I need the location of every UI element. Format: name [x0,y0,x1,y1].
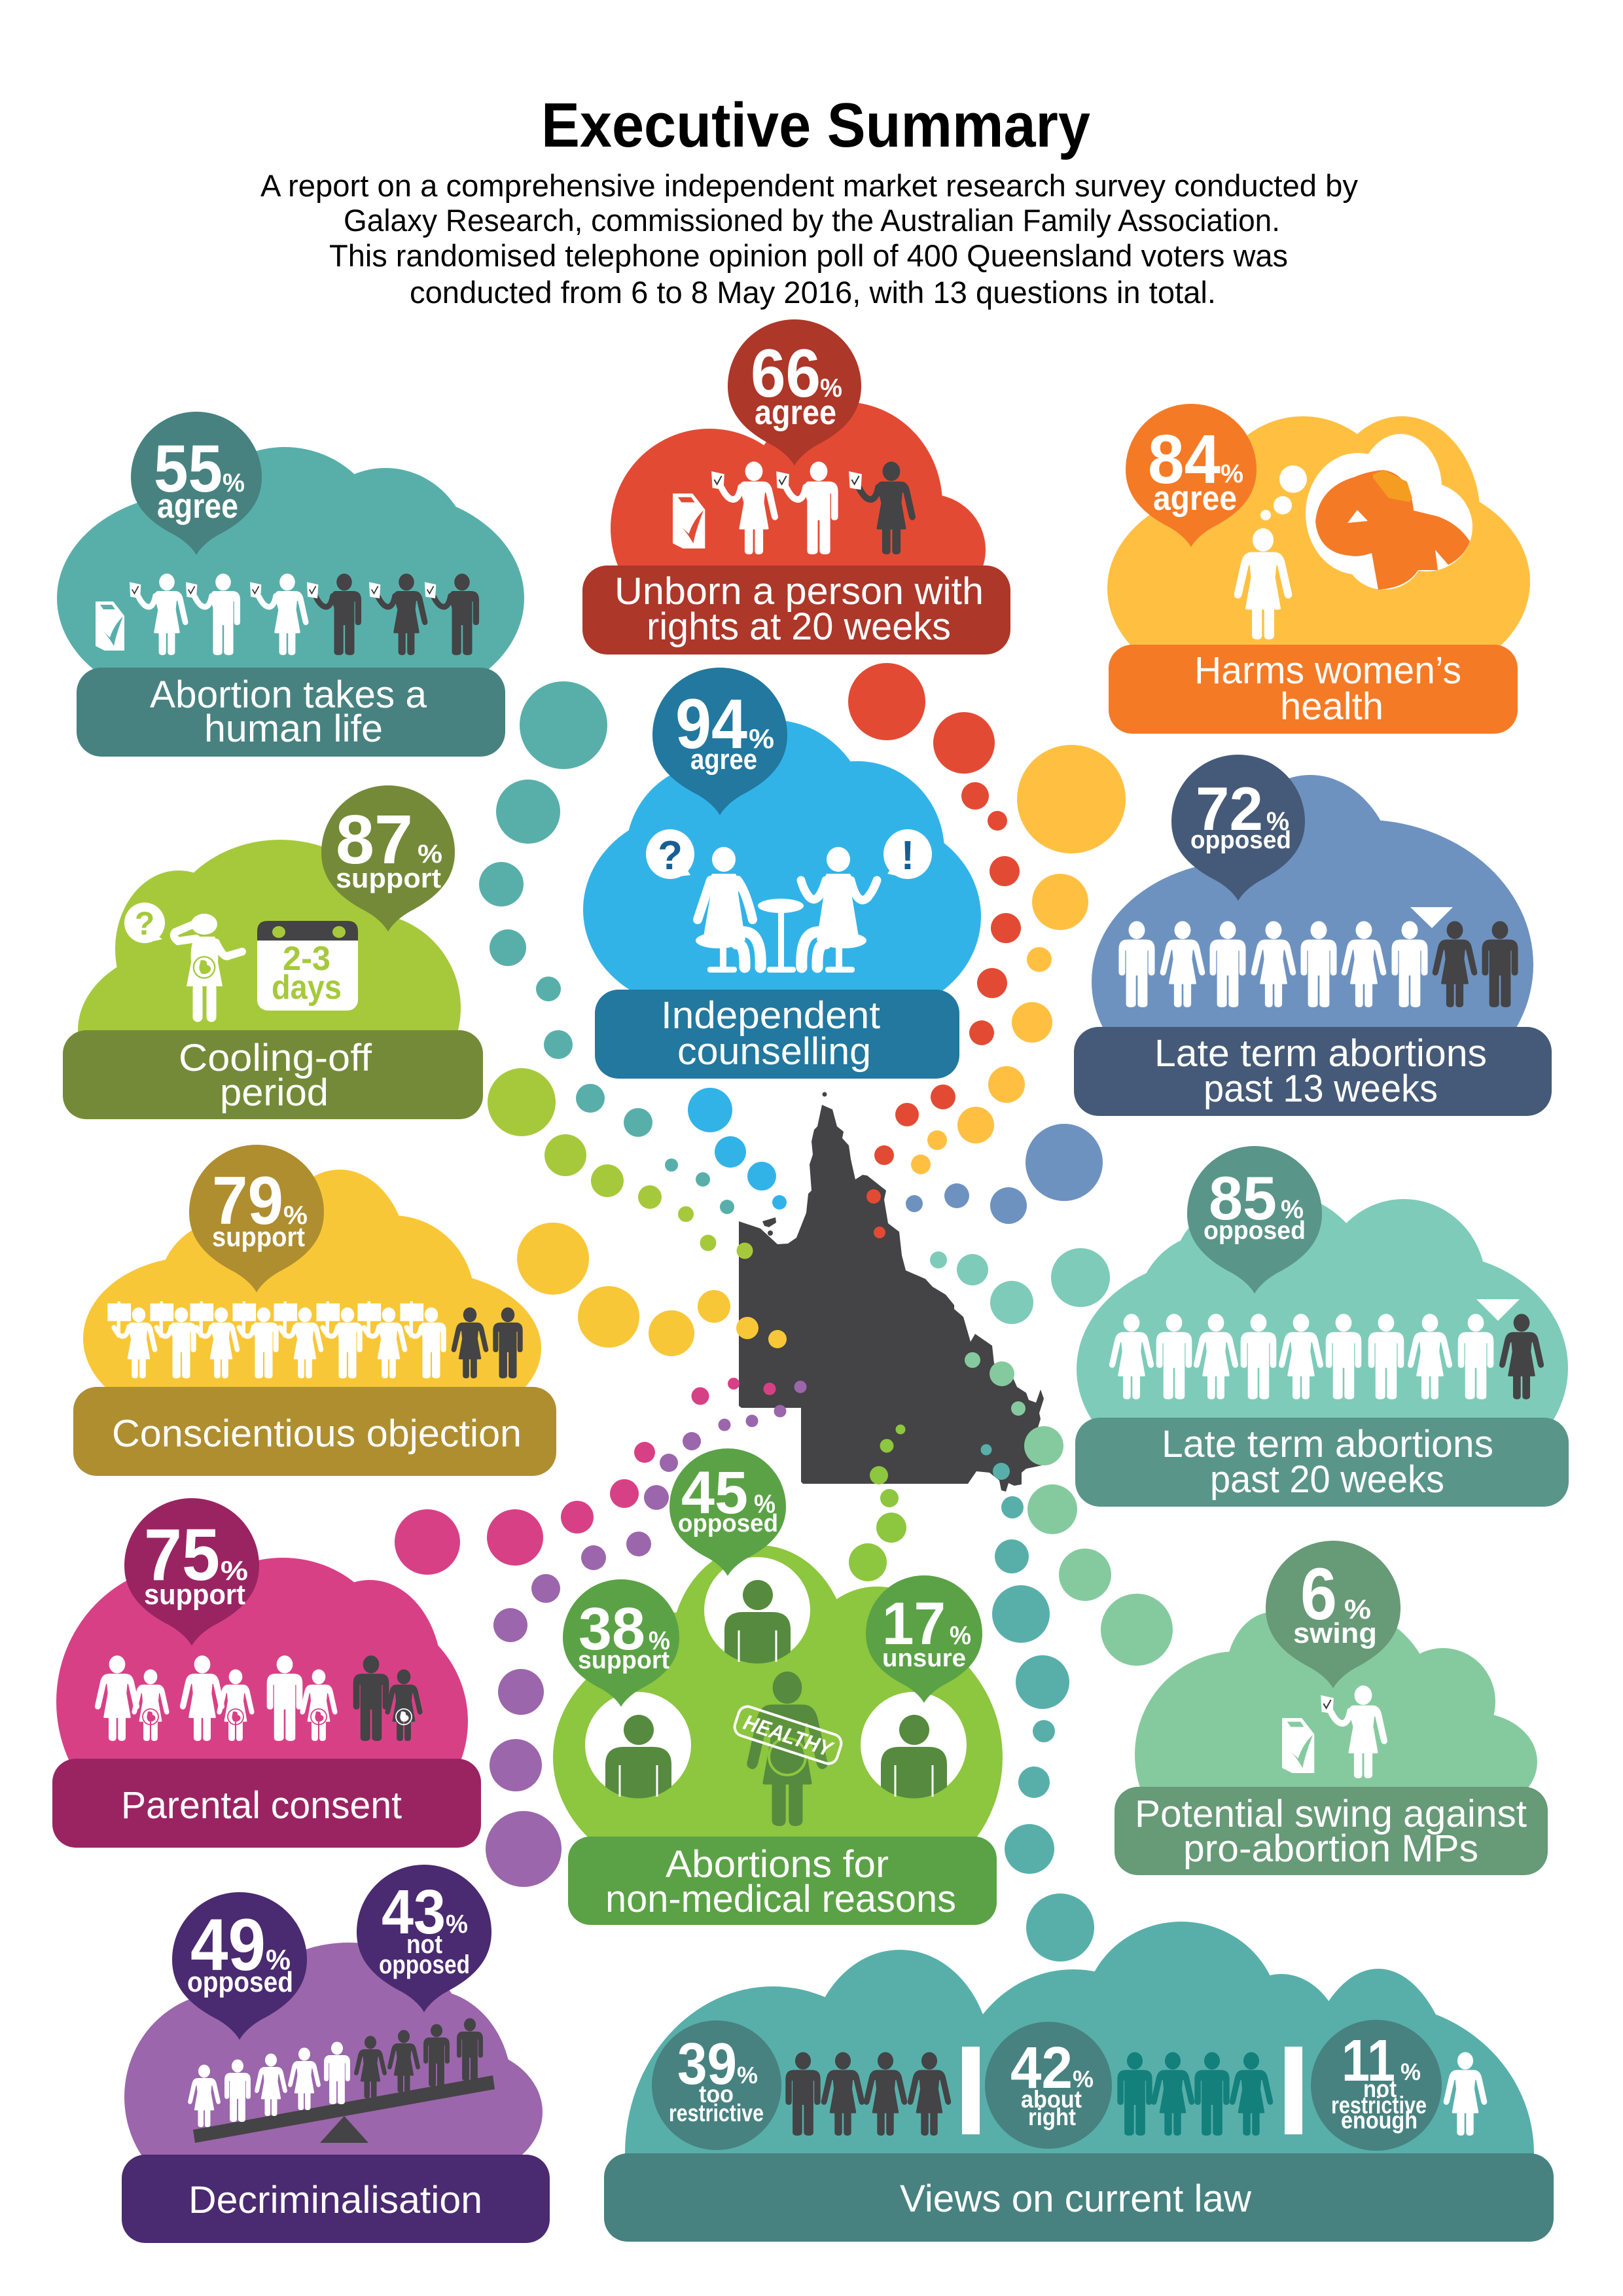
badge: 79% support: % [283,1201,308,1230]
icon: pregnant woman with healthy stamp [732,1672,844,1826]
label bar: period [220,1071,329,1114]
panel: abortions for non-medical reasons [553,1448,1003,1925]
label bar [568,1837,997,1925]
cloud [1135,1607,1537,1858]
badge: 49% opposed: 49 [190,1904,266,1986]
label bar [1109,645,1518,734]
panel: conscientious objection [73,1145,556,1476]
cloud [583,720,981,1014]
label bar: Abortions for [666,1843,889,1886]
badge: 84% agree: agree [1153,479,1237,518]
cloud [78,840,461,1115]
icon: calendar 2-3 days [257,921,358,1011]
label bar [1074,1027,1552,1116]
speech bubble: question: ? [658,833,683,878]
badge: 45% opposed: % [754,1490,776,1518]
panel: parental consent [52,1498,481,1848]
label bar: Independent [661,994,880,1037]
label bar: Unborn a person with [615,570,984,613]
seesaw with people [188,2018,495,2143]
thought cloud with distressed woman [1306,434,1472,590]
panel: cooling-off period [63,785,483,1119]
badge: 94% agree: % [749,723,774,754]
label bar: Abortion takes a [150,673,427,716]
badge: 87% support [321,785,455,931]
badge: 43% not opposed: 43 [382,1877,446,1947]
label bar [604,2153,1554,2242]
panel: potential swing [1115,1541,1548,1875]
label bar: human life [204,708,383,750]
label bar: Late term abortions [1162,1423,1493,1465]
label bar: Conscientious objection [112,1412,522,1455]
intro text block: A report on a comprehensive independent market research survey conducted by [260,168,1358,203]
badge: 75% support: support [144,1579,245,1611]
badge: 6% swing: 6 [1300,1553,1337,1635]
icon: two women at a table [696,847,877,973]
cloud [1092,775,1533,1110]
cloud [625,1922,1534,2153]
badge: 84% agree: % [1221,459,1243,488]
speech bubble: exclamation: ! [901,833,914,878]
badge: 79% support: 79 [212,1163,283,1239]
circle: unsure person [861,1692,967,1799]
label bar: Parental consent [121,1784,402,1827]
panel: unborn a person [582,319,1010,655]
map of Queensland [739,1092,1044,1492]
cloud [553,1545,1003,1895]
badge: 42% about right: right [1028,2104,1076,2130]
label bar [52,1759,481,1848]
badge: 94% agree: 94 [675,684,747,763]
badge: 6% swing: % [1344,1594,1371,1624]
badge: 39% too restrictive: restrictive [669,2100,764,2126]
panel: decriminalisation [122,1865,550,2243]
cloud [83,1170,541,1425]
badge: 75% support: 75 [144,1514,220,1596]
label bar: health [1280,685,1383,728]
badge: 72% opposed: % [1266,807,1289,836]
badge: 79% support: support [212,1221,305,1252]
badge: 87% support: % [418,840,442,869]
intro text block: conducted from 6 to 8 May 2016, with 13 questions in total. [410,275,1216,310]
badge: 49% opposed: opposed [187,1966,293,1998]
title: Executive Summary [541,90,1090,160]
badge: 17% unsure [866,1575,982,1703]
cloud [57,447,524,704]
badge: 45% opposed [669,1448,786,1576]
label bar [77,668,505,757]
badge: 84% agree: 84 [1148,421,1221,498]
badge: 39% too restrictive: too [699,2081,734,2108]
icon: calendar 2-3 days: 2-3 [283,940,330,978]
cloud [56,1558,468,1839]
badge: 85% opposed [1187,1146,1322,1294]
label bar [1075,1418,1569,1507]
badge: 17% unsure: % [950,1621,971,1650]
label bar: counselling [677,1030,871,1073]
badge: 42% about right: % [1073,2066,1094,2092]
badge: 55% agree: 55 [154,431,223,506]
panel: abortion takes a human life [57,412,524,757]
label bar: past 20 weeks [1210,1458,1444,1501]
label bar [582,565,1010,655]
badge: 11% not restrictive enough [1311,2020,1442,2151]
marker triangle [1476,1299,1520,1321]
cloud [124,1943,543,2202]
badge: 66% agree [728,319,861,465]
label bar: Decriminalisation [188,2179,482,2221]
icon: pregnant woman with healthy stamp: HEALTHY [741,1710,837,1762]
badge: 75% support: % [221,1555,248,1586]
label bar: Views on current law [900,2178,1252,2220]
people: too restrictive [785,2052,951,2136]
badge: 6% swing [1266,1541,1400,1689]
people: about right [1117,2052,1273,2136]
badge: 11% not restrictive enough: restrictive [1331,2092,1427,2119]
label bar [63,1030,483,1119]
divider bars [962,2047,1302,2134]
badge: 11% not restrictive enough: not [1363,2075,1397,2102]
intro text block: This randomised telephone opinion poll of 400 Queensland voters was [329,238,1288,273]
badge: 87% support: 87 [336,801,413,878]
badge: 43% not opposed: % [446,1910,468,1939]
badge: 11% not restrictive enough: enough [1341,2107,1418,2134]
badge: 17% unsure: 17 [882,1590,946,1657]
badge: 38% support: 38 [579,1596,645,1662]
badge: 72% opposed [1171,755,1305,901]
badge: 39% too restrictive: % [737,2062,758,2089]
panel: late term abortions past 13 weeks [1074,755,1552,1116]
speech bubble: question [124,903,165,943]
badge: 49% opposed [172,1892,307,2040]
badge: 66% agree: % [820,374,842,403]
badge: 85% opposed: opposed [1204,1217,1306,1245]
badge: 55% agree [131,412,262,555]
label bar: past 13 weeks [1204,1067,1438,1110]
intro text block [260,168,1358,310]
label bar: Cooling-off [179,1037,372,1079]
badge: 85% opposed: % [1281,1195,1304,1224]
badge: 94% agree [652,668,787,816]
badge: 49% opposed: % [266,1944,291,1976]
panel: views on current law [604,1922,1554,2242]
icon: calendar 2-3 days: days [272,969,342,1007]
icon: pregnant woman [174,914,242,1017]
badge: 45% opposed: opposed [678,1510,778,1537]
badge: 87% support: support [336,863,441,893]
badge: 43% not opposed: not [406,1930,442,1959]
label bar: non-medical reasons [605,1878,956,1920]
parent and pregnant daughter icons [95,1655,423,1741]
label bar: Late term abortions [1154,1032,1487,1075]
badge: 45% opposed: 45 [681,1460,748,1526]
badge: 39% too restrictive: 39 [677,2032,737,2097]
people icons with ballot box [673,461,916,554]
people icons [1118,921,1518,1007]
cloud [1107,416,1530,690]
badge: 72% opposed: 72 [1196,774,1263,843]
icon: voter and ballot box [1282,1685,1387,1778]
badge: 72% opposed: opposed [1190,827,1291,854]
panel: independent counselling [583,668,981,1079]
badge: 43% not opposed [357,1865,491,2013]
badge: 39% too restrictive [652,2020,781,2150]
label bar [1115,1787,1548,1875]
speech bubble: question [646,829,694,879]
badge: 55% agree: % [223,469,245,497]
people icons [1109,1314,1544,1399]
badge: 17% unsure: unsure [882,1645,966,1672]
speech bubble: exclamation [883,829,932,879]
badge: 43% not opposed: opposed [379,1950,470,1979]
badge: 84% agree [1126,404,1257,547]
label bar [595,990,959,1079]
circle: opposed person [704,1557,810,1664]
badge: 11% not restrictive enough: % [1400,2058,1421,2085]
panel: late term abortions past 20 weeks [1075,1146,1569,1507]
intro text block: Galaxy Research, commissioned by the Australian Family Association. [344,203,1280,238]
people icons with ballot box [96,573,479,655]
badge: 38% support [563,1579,679,1707]
badge: 66% agree: agree [755,393,836,432]
badge: 75% support [124,1498,259,1646]
cloud [1077,1191,1568,1482]
label bar: pro-abortion MPs [1183,1827,1478,1870]
badge: 66% agree: 66 [751,336,821,412]
label bar: rights at 20 weeks [647,605,951,648]
badge: 42% about right: about [1021,2086,1082,2113]
badge: 6% swing: swing [1293,1617,1377,1649]
person: not restrictive enough [1444,2052,1487,2136]
label bar: Harms women’s [1194,649,1461,692]
badge: 94% agree: agree [690,744,757,776]
label bar [73,1387,556,1476]
panel: harms women's health [1107,404,1530,734]
badge: 42% about right: 42 [1010,2036,1073,2101]
badge: 79% support [189,1145,324,1293]
badge: 55% agree: agree [157,487,238,526]
badge: 42% about right [985,2022,1112,2149]
label bar: Potential swing against [1135,1793,1527,1835]
badge: 11% not restrictive enough: 11 [1342,2028,1395,2094]
speech bubble: question: ? [135,905,154,942]
cloud [611,402,986,628]
circle: supporting person [585,1692,691,1799]
badge: 38% support: support [578,1647,669,1674]
marker triangle [1410,907,1453,928]
badge: 38% support: % [649,1626,670,1655]
thought-bubble dots [395,663,1173,1962]
icon: woman thinking [1234,465,1307,639]
people icons with placards [107,1301,523,1378]
label bar [122,2155,550,2243]
badge: 85% opposed: 85 [1209,1164,1277,1232]
